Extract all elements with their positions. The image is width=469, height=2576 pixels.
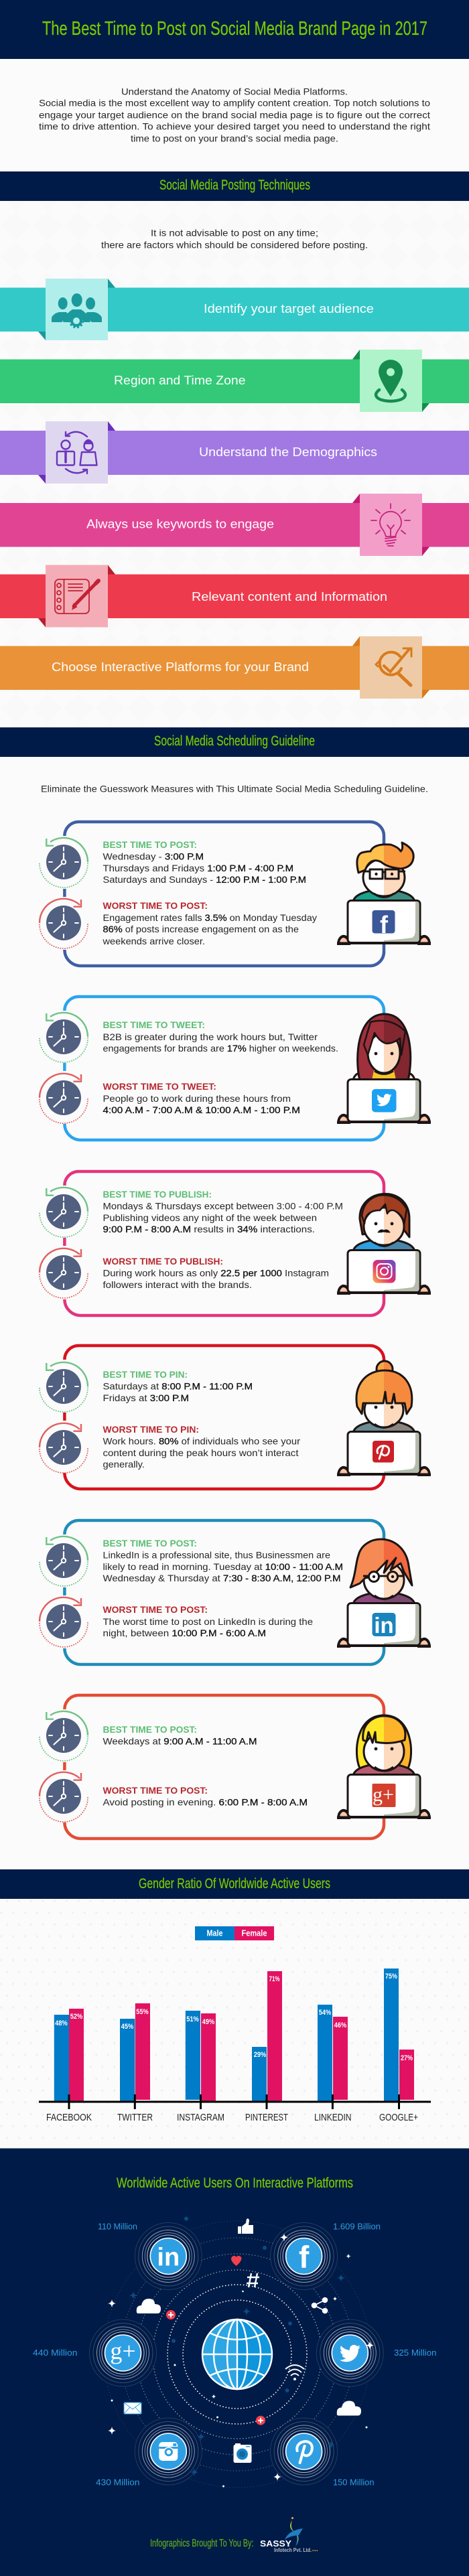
worst time text <box>103 1424 301 1470</box>
icon: mail <box>124 2403 141 2414</box>
user count labels: 1.609 Billion <box>333 2221 381 2232</box>
icon: hash <box>247 2273 259 2287</box>
worst time text: Avoid posting in evening. 6:00 P.M - 8:00 A.M <box>103 1798 308 1807</box>
best time text: BEST TIME TO POST: <box>103 1724 197 1735</box>
bars: facebook <box>54 2009 84 2102</box>
social badge: google plus: g+ <box>110 2338 136 2364</box>
best time text: Thursdays and Fridays 1:00 P.M - 4:00 P.M <box>103 863 293 873</box>
globe <box>202 2319 272 2389</box>
ribbon: always use keywords to engage: Always use keywords to engage <box>86 517 274 530</box>
chart legend <box>195 1926 274 1940</box>
ribbon: always use keywords to engage <box>0 494 469 556</box>
best time text: Wednesday & Thursday at 7:30 - 8:30 A.M, 12:00 P.M <box>103 1573 340 1583</box>
character with laptop: google plus <box>337 1715 431 1819</box>
worst time text: weekends arrive closer. <box>102 936 205 946</box>
bars: instagram: 51% <box>186 2015 199 2023</box>
social badge: pinterest <box>271 2418 338 2485</box>
panel: twitter schedule <box>40 997 431 1140</box>
ribbon: choose interactive platforms: Choose Interactive Platforms for your Brand <box>52 660 309 674</box>
best time text <box>103 839 306 885</box>
icon: heart <box>231 2256 241 2266</box>
user count labels <box>33 2221 437 2488</box>
worst time text: 4:00 A.M - 7:00 A.M & 10:00 A.M - 1:00 P.M <box>103 1105 300 1115</box>
icon: red plus bottom <box>256 2416 265 2425</box>
worst time text: WORST TIME TO POST: <box>103 1604 208 1615</box>
chart legend: Male <box>206 1929 223 1938</box>
chart axis <box>39 2094 431 2109</box>
worst time text: The worst time to post on LinkedIn is during the <box>103 1617 313 1627</box>
axis labels: INSTAGRAM <box>177 2112 224 2123</box>
worst time text: Work hours. 80% of individuals who see your <box>103 1436 301 1447</box>
axis labels <box>46 2112 418 2123</box>
social badge: linkedin: in <box>157 2244 180 2272</box>
social badge: google plus <box>90 2319 157 2386</box>
clock: worst time <box>40 1074 88 1123</box>
heading band: gender ratio <box>0 1869 469 1899</box>
diamond background pattern <box>0 201 469 727</box>
user count labels: 325 Million <box>394 2348 437 2358</box>
best time text: 9:00 P.M - 8:00 A.M results in 34% interactions. <box>103 1224 315 1234</box>
character with laptop: pinterest <box>337 1361 431 1476</box>
best time text: BEST TIME TO POST: <box>103 839 197 850</box>
best time text: BEST TIME TO PIN: <box>103 1369 188 1380</box>
ribbon: understand the demographics: Understand the Demographics <box>199 445 377 459</box>
best time text: Mondays & Thursdays except between 3:00 - 4:00 P.M <box>103 1202 343 1211</box>
clock: worst time <box>40 1248 88 1298</box>
bars: google plus: 27% <box>401 2054 413 2062</box>
clock: best time <box>40 1711 88 1761</box>
intro text: engage your target audience on the brand social media page is to figure out the correct <box>39 110 430 121</box>
icon: camera <box>233 2443 252 2463</box>
icon: people with gear <box>52 293 102 328</box>
best time text: BEST TIME TO PUBLISH: <box>103 1189 212 1200</box>
panel: instagram schedule <box>40 1171 431 1315</box>
panel: pinterest schedule <box>40 1346 431 1489</box>
worst time text <box>103 1785 308 1807</box>
character with laptop: facebook: f <box>380 911 389 938</box>
ribbon: understand the demographics <box>0 421 469 484</box>
heading band: scheduling guideline <box>0 727 469 757</box>
best time text: likely to read in morning. Tuesday at 10:00 - 11:00 A.M <box>103 1562 343 1572</box>
social badge: facebook <box>271 2222 338 2289</box>
best time text: Fridays at 3:00 P.M <box>103 1393 189 1403</box>
best time text: Wednesday - 3:00 P.M <box>103 852 204 861</box>
icon: location pin <box>376 360 405 401</box>
heading band: gender ratio: Gender Ratio Of Worldwide Active Users <box>139 1876 330 1891</box>
bars: linkedin <box>318 2005 348 2102</box>
worst time text <box>102 900 317 946</box>
intro text: time to drive attention. To achieve your desired target you need to understand the right <box>39 122 430 131</box>
decorative stars and dots <box>108 2217 374 2488</box>
bars: google plus: 75% <box>385 1973 397 1981</box>
panel: google plus schedule <box>40 1695 431 1839</box>
axis labels: LINKEDIN <box>314 2112 351 2123</box>
user count labels: 430 Million <box>96 2477 139 2488</box>
intro text: time to post on your brand’s social media page. <box>131 134 338 143</box>
bars: linkedin: 46% <box>334 2021 346 2029</box>
title banner <box>0 0 469 59</box>
icon: share <box>312 2297 327 2313</box>
ribbon: choose interactive platforms <box>0 636 469 699</box>
character with laptop: linkedin <box>337 1539 431 1648</box>
clock: worst time <box>40 899 88 948</box>
user count labels: 110 Million <box>98 2221 137 2232</box>
social badge: instagram <box>135 2418 202 2485</box>
clock: worst time <box>40 1423 88 1473</box>
heading: worldwide active users: Worldwide Active Users On Interactive Platforms <box>117 2175 353 2191</box>
bars: google plus <box>384 1969 414 2102</box>
intro text <box>39 87 430 143</box>
ribbon: relevant content and information: Relevant content and Information <box>192 590 387 603</box>
clock: best time <box>40 1188 88 1237</box>
best time text: BEST TIME TO TWEET: <box>103 1019 205 1030</box>
worst time text <box>103 1256 329 1290</box>
ribbon: identify your target audience: Identify your target audience <box>204 302 374 315</box>
bars: twitter <box>120 2003 150 2102</box>
logo: sassy infotech: SASSY <box>260 2539 292 2549</box>
best time text: Saturdays at 8:00 P.M - 11:00 P.M <box>103 1381 253 1392</box>
best time text: BEST TIME TO POST: <box>103 1538 197 1549</box>
best time text <box>103 1724 257 1747</box>
icon: light bulb <box>371 504 410 546</box>
social badge: facebook: f <box>299 2240 310 2275</box>
character with laptop: google plus: g+ <box>373 1784 394 1806</box>
worst time text: content during the peak hours won’t interact <box>103 1448 299 1458</box>
worst time text: WORST TIME TO PUBLISH: <box>103 1256 223 1267</box>
user count labels: 440 Million <box>33 2348 78 2358</box>
bars: pinterest <box>252 1971 282 2102</box>
intro text: Understand the Anatomy of Social Media Platforms. <box>121 87 348 96</box>
panel: linkedin schedule <box>40 1520 431 1664</box>
bars: instagram: 49% <box>202 2018 214 2026</box>
clock: best time <box>40 1362 88 1412</box>
dotted background pattern <box>0 1899 469 2149</box>
bars: instagram <box>186 2011 216 2102</box>
best time text <box>103 1019 338 1054</box>
worst time text: WORST TIME TO PIN: <box>103 1424 199 1435</box>
worst time text: WORST TIME TO POST: <box>103 1785 208 1796</box>
user count labels: 150 Million <box>333 2477 374 2488</box>
best time text <box>103 1369 253 1403</box>
icon: red plus top <box>166 2310 176 2319</box>
bars: linkedin: 54% <box>319 2009 331 2017</box>
bars: pinterest: 29% <box>254 2051 266 2059</box>
bars: pinterest: 71% <box>269 1975 280 1983</box>
intro text: Social media is the most excellent way to amplify content creation. Top notch solutions to <box>39 98 430 109</box>
worst time text: Engagement rates falls 3.5% on Monday Tuesday <box>103 913 317 923</box>
social badge: linkedin <box>135 2222 202 2289</box>
best time text: Saturdays and Sundays - 12:00 P.M - 1:00 P.M <box>103 875 306 885</box>
dotted orbit rings <box>104 2221 371 2488</box>
worst time text: People go to work during these hours from <box>103 1094 291 1104</box>
heading band: posting techniques: Social Media Posting Techniques <box>159 177 310 193</box>
worst time text <box>103 1081 300 1115</box>
best time text <box>103 1189 343 1234</box>
icon: target search with arrow <box>376 648 411 685</box>
panel: facebook schedule <box>40 822 431 966</box>
best time text: LinkedIn is a professional site, thus Businessmen are <box>103 1550 330 1561</box>
ribbon: region and time zone <box>0 350 469 412</box>
heading band: posting techniques <box>0 171 469 201</box>
axis labels: GOOGLE+ <box>379 2112 418 2123</box>
best time text <box>103 1538 343 1583</box>
clock: worst time <box>40 1772 88 1822</box>
bars: facebook: 48% <box>55 2019 68 2027</box>
techniques intro text: It is not advisable to post on any time; <box>151 228 318 238</box>
worst time text: WORST TIME TO TWEET: <box>103 1081 216 1092</box>
character with laptop: instagram <box>337 1194 431 1295</box>
ribbon: region and time zone: Region and Time Zone <box>114 374 245 387</box>
best time text: Weekdays at 9:00 A.M - 11:00 A.M <box>103 1736 257 1747</box>
ribbon: relevant content and information <box>0 565 469 627</box>
clock: worst time <box>40 1597 88 1647</box>
social badge: twitter <box>316 2319 383 2386</box>
worst time text: 86% of posts increase engagement on as the <box>103 924 299 934</box>
character with laptop: facebook <box>337 843 431 945</box>
techniques intro text: there are factors which should be considered before posting. <box>101 240 368 251</box>
worst time text: WORST TIME TO POST: <box>103 900 208 911</box>
icon: thumbs up <box>238 2218 253 2234</box>
logo: sassy infotech <box>260 2517 318 2553</box>
bars: twitter: 55% <box>136 2008 149 2016</box>
icon: demographics people <box>57 432 96 474</box>
techniques intro text <box>101 228 368 251</box>
icon: wifi <box>285 2365 304 2380</box>
icon: cloud right <box>337 2401 361 2415</box>
footer credit: Infographics Brought To You By: <box>150 2538 253 2549</box>
worst time text: followers interact with the brands. <box>103 1280 252 1290</box>
best time text: B2B is greater during the work hours but, Twitter <box>103 1032 318 1042</box>
character with laptop: twitter <box>337 1014 431 1124</box>
worst time text: night, between 10:00 P.M - 6:00 A.M <box>103 1628 266 1638</box>
best time text: Publishing videos any night of the week between <box>103 1213 317 1223</box>
axis labels: PINTEREST <box>245 2112 288 2123</box>
clock: best time <box>40 1536 88 1586</box>
clock: best time <box>40 838 88 887</box>
axis labels: TWITTER <box>117 2112 153 2123</box>
bars: twitter: 45% <box>121 2023 133 2031</box>
scheduling intro text: Eliminate the Guesswork Measures with This Ultimate Social Media Scheduling Guideline. <box>41 784 428 794</box>
best time text: engagements for brands are 17% higher on weekends. <box>103 1044 338 1054</box>
bars: facebook: 52% <box>70 2013 82 2021</box>
chart legend: Female <box>241 1929 267 1938</box>
worst time text: During work hours as only 22.5 per 1000 Instagram <box>103 1269 329 1278</box>
heading band: scheduling guideline: Social Media Scheduling Guideline <box>154 733 315 749</box>
ribbon: identify your target audience <box>0 279 469 340</box>
icon: notebook and pencil <box>55 579 98 614</box>
icon: cloud left <box>137 2299 161 2313</box>
worst time text <box>103 1604 313 1638</box>
worst time text: generally. <box>103 1459 145 1470</box>
axis labels: FACEBOOK <box>46 2112 92 2123</box>
bar chart: gender ratio <box>39 1969 431 2123</box>
character with laptop: linkedin: in <box>374 1613 394 1638</box>
clock: best time <box>40 1013 88 1062</box>
logo: sassy infotech: Infotech Pvt. Ltd. <box>274 2547 312 2553</box>
panel: worldwide active users <box>0 2149 469 2576</box>
